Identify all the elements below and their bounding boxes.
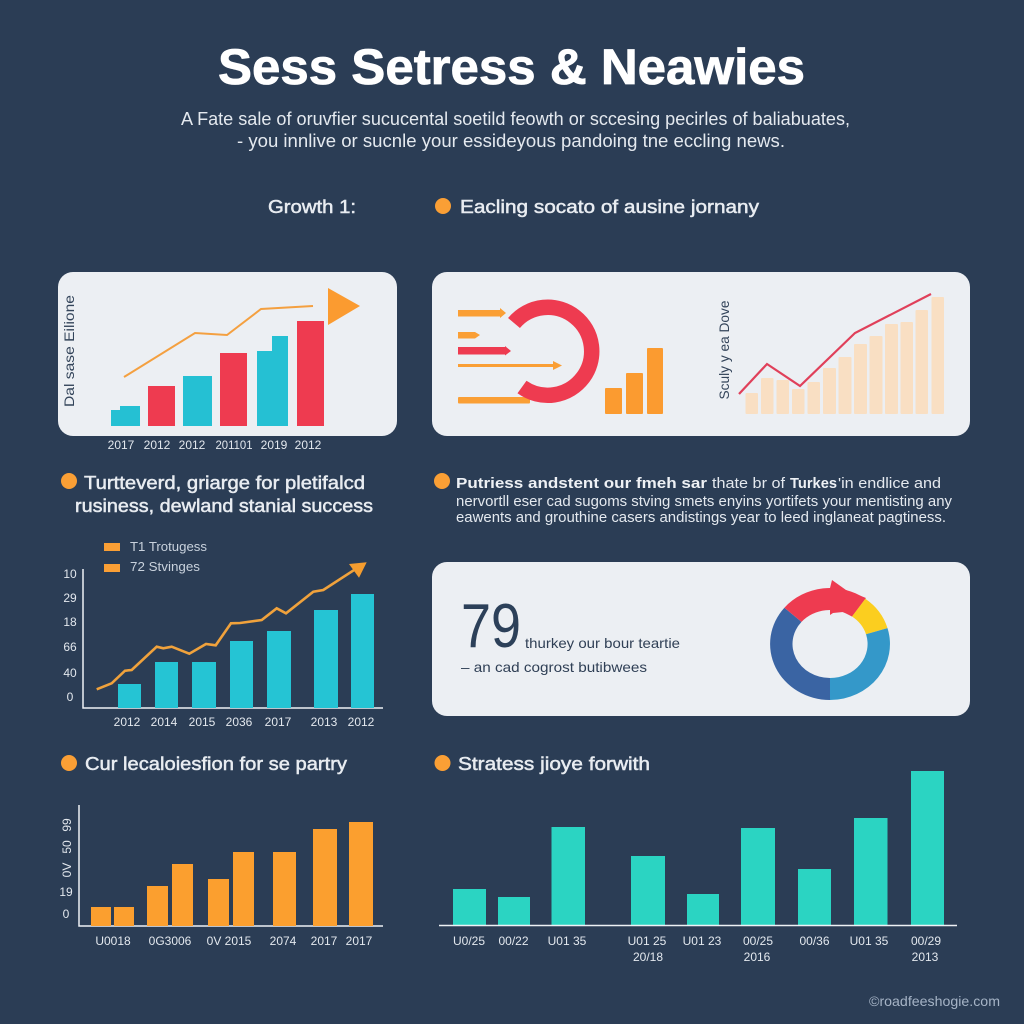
- axis years: growth bar chart: 2019: [261, 438, 288, 452]
- heading: left middle: rusiness, dewland stanial success: [75, 495, 373, 516]
- heading: journey: Eacling socato of ausine jornany: [460, 196, 760, 217]
- panel: arrows and line chart: [432, 272, 970, 436]
- y axis labels: 0: [63, 907, 70, 921]
- text block: right middle: Putriess andstent our fmeh sar: [456, 475, 707, 492]
- y axis labels: 10: [63, 567, 77, 581]
- heading: growth: Growth 1:: [268, 196, 356, 217]
- chart: teal bars: [439, 771, 957, 964]
- x axis labels: 2014: [151, 715, 178, 729]
- panel: growth bar chart: [58, 272, 397, 436]
- trend line: [124, 306, 313, 377]
- legend: T1 Trotugess: [130, 540, 207, 554]
- subtitle: [181, 108, 850, 151]
- x axis labels: 00/22: [498, 934, 529, 948]
- x axis labels: [95, 934, 373, 948]
- trend line: [97, 568, 357, 689]
- x axis labels: [453, 934, 941, 964]
- x axis labels: 00/25: [743, 934, 773, 948]
- y axis labels: 0V: [60, 863, 74, 877]
- title: Sess Setress & Neawies: [218, 39, 805, 95]
- bars: [118, 594, 374, 708]
- axis years: growth bar chart: 2012: [295, 438, 322, 452]
- x axis labels: U01 35: [548, 934, 587, 948]
- stat caption: – an cad cogrost butibwees: [461, 659, 647, 675]
- x axis labels: 00/36: [799, 934, 830, 948]
- x axis labels: U01 35: [850, 934, 889, 948]
- ring: [514, 307, 592, 395]
- axis years: growth bar chart: 2012: [179, 438, 206, 452]
- x axis labels: 2016: [744, 950, 771, 964]
- text block: right middle: 'in endlice and: [838, 475, 941, 492]
- x axis labels: U01 25: [628, 934, 667, 948]
- x axis labels: 00/29: [911, 934, 941, 948]
- x axis labels: U0/25: [453, 934, 485, 948]
- subtitle: - you innlive or sucnle your essideyous pandoing tne eccling news.: [237, 130, 785, 151]
- heading: bottom right: Stratess jioye forwith: [458, 753, 650, 774]
- y axis labels: 18: [63, 615, 77, 629]
- red trend line: [739, 294, 931, 394]
- big number: 79: [461, 592, 521, 661]
- heading: left middle: [61, 472, 373, 516]
- donut chart: [770, 580, 890, 700]
- y axis labels: 0: [67, 690, 74, 704]
- credit: ©roadfeeshogie.com: [869, 993, 1000, 1009]
- x axis labels: 0G3006: [149, 934, 192, 948]
- axis years: growth bar chart: 2012: [144, 438, 171, 452]
- axis label: Sculy y ea Dove: [717, 301, 732, 399]
- arrow head: [328, 288, 360, 325]
- axis years: growth bar chart: 201101: [216, 438, 253, 452]
- chart: orange bars: [59, 805, 383, 948]
- x axis labels: 2015: [189, 715, 216, 729]
- heading: bottom left: Cur lecaloiesfion for se partry: [85, 753, 348, 774]
- x axis labels: 2017: [311, 934, 338, 948]
- subtitle: A Fate sale of oruvfier sucucental soetild feowth or sccesing pecirles of baliabuates,: [181, 108, 850, 129]
- axis label: Dal sase Eilione: [62, 295, 77, 407]
- x axis labels: 2017: [346, 934, 373, 948]
- y axis labels: 19: [59, 885, 73, 899]
- text block: right middle: nervortll eser cad sugoms stving smets enyins yortifets your mentisting any: [456, 493, 952, 510]
- x axis labels: U01 23: [683, 934, 722, 948]
- bars: [453, 771, 944, 925]
- y axis labels: 99: [60, 818, 74, 832]
- y axis labels: 66: [63, 640, 77, 654]
- x axis labels: 2012: [114, 715, 141, 729]
- x axis labels: 2017: [265, 715, 292, 729]
- text block: right middle: thate br of: [712, 475, 786, 492]
- x axis labels: 2013: [912, 950, 939, 964]
- peach bars: [746, 297, 944, 414]
- x axis labels: 2074: [270, 934, 297, 948]
- y axis labels: 40: [63, 666, 77, 680]
- bars: [91, 822, 373, 926]
- y axis labels: [63, 567, 77, 704]
- arrow head: [349, 562, 367, 578]
- panel: stat and donut: [432, 562, 970, 716]
- stat caption: thurkey our bour teartie: [525, 635, 680, 651]
- axis years: growth bar chart: 2017: [108, 438, 135, 452]
- x axis labels: [114, 715, 375, 729]
- heading: left middle: Turtteverd, griarge for pletifalcd: [84, 472, 365, 493]
- x axis labels: 20/18: [633, 950, 663, 964]
- chart: teal bars with trend: [63, 540, 383, 729]
- x axis labels: 2012: [348, 715, 375, 729]
- small bars: [605, 348, 663, 414]
- x axis labels: 2013: [311, 715, 338, 729]
- y axis labels: [59, 818, 74, 921]
- bars: [111, 321, 324, 426]
- x axis labels: 2036: [226, 715, 253, 729]
- x axis labels: 0V 2015: [207, 934, 252, 948]
- legend: [104, 540, 207, 574]
- legend: 72 Stvinges: [130, 560, 200, 574]
- y axis labels: 50: [60, 840, 74, 854]
- stat caption: [461, 635, 680, 675]
- x axis labels: U0018: [95, 934, 131, 948]
- text block: right middle: eawents and grouthine casers andistings year to leed inglaneat pagtiness.: [456, 509, 946, 526]
- text block: right middle: [434, 473, 952, 526]
- text block: right middle: Turkes: [790, 475, 837, 492]
- arrows: [458, 308, 562, 404]
- axis years: growth bar chart: [108, 438, 322, 452]
- y axis labels: 29: [63, 591, 77, 605]
